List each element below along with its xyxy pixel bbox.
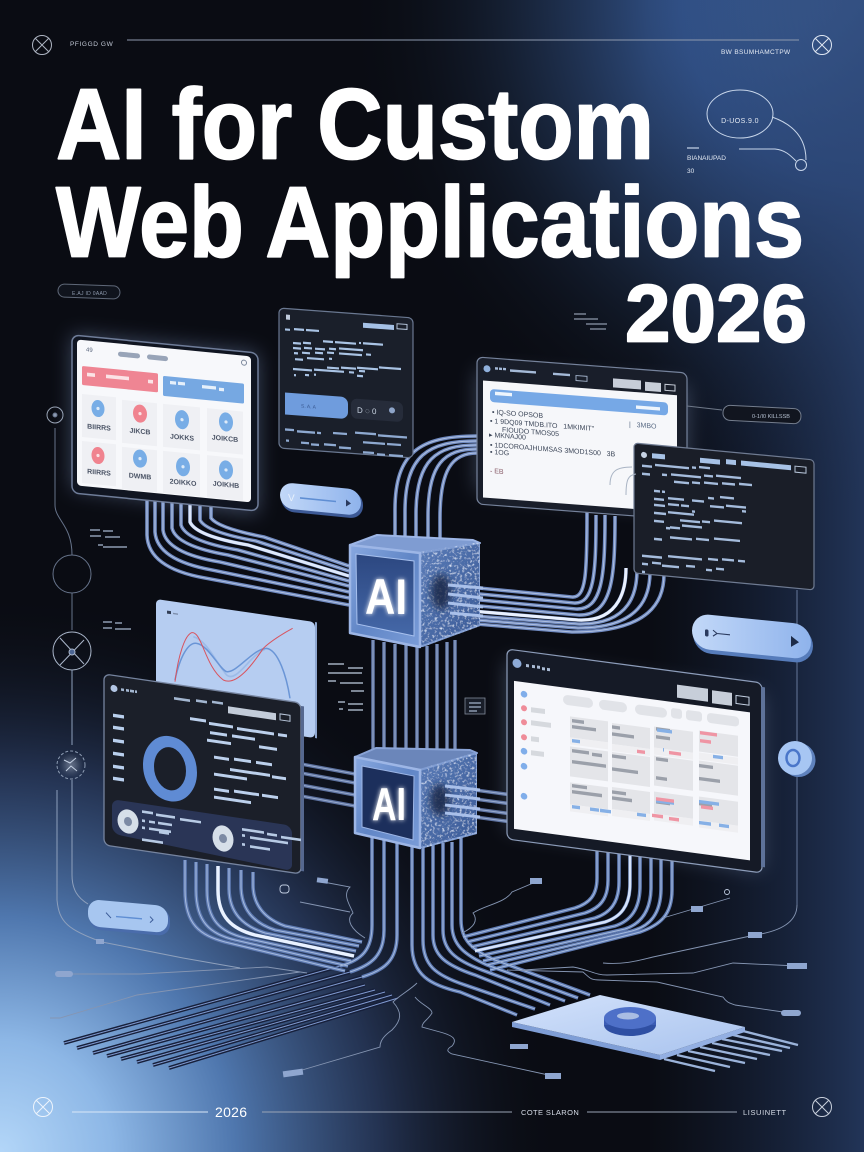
cube label AI: AI [372, 778, 406, 830]
window bar [512, 658, 749, 708]
window top bar [484, 365, 675, 393]
thin connector traces with chips [50, 877, 807, 1079]
toolbar icons [351, 398, 403, 422]
annotation diagram top right: BIANAIUPAD [687, 155, 726, 162]
annotation diagram top right: 30 [687, 168, 695, 175]
metric tiles: JOIKHB [213, 481, 239, 490]
text dashes chart [328, 664, 364, 710]
annotation diagram top right [687, 90, 806, 175]
blue header card [163, 376, 244, 404]
code lines [642, 462, 752, 582]
lower lines [285, 427, 407, 456]
title: 2026 [625, 268, 807, 360]
metric tiles: BIIRRS [87, 423, 111, 433]
footer strip [34, 1098, 832, 1120]
icon: top-left crossed circle [32, 36, 52, 54]
code lines [285, 328, 401, 383]
pill button upper: V [288, 493, 295, 504]
header left label: PFIGGD GW [70, 41, 114, 48]
footer labels: COTE SLARON [521, 1108, 579, 1117]
header right label: BW BSUMHAMCTPW [721, 49, 791, 56]
icon: crossed circuit node [53, 632, 91, 670]
panel: dark code window [279, 308, 413, 458]
panel: browser window with list [477, 357, 687, 520]
header strip [32, 36, 832, 56]
list text: - EB [490, 468, 504, 476]
footer strip: LISUINETT [743, 1108, 787, 1117]
list text: ▪ IQ-SO OPSOB [492, 409, 543, 420]
title: AI for Custom [56, 68, 654, 180]
left side circuit line [47, 407, 240, 968]
sidebar ticks [113, 715, 124, 780]
panel: dashboard UI [72, 335, 258, 514]
dashboard header [86, 345, 246, 369]
chart text lines [190, 719, 287, 808]
sidebar [521, 691, 551, 803]
small chip label center [465, 698, 485, 714]
list text: FIOUDO TMOS05 [502, 427, 559, 438]
pill button upper [280, 482, 363, 519]
blue action button: S. A. A [301, 404, 317, 411]
annotation diagram top right: D-UOS.9.0 [721, 118, 759, 125]
connector line right [796, 590, 798, 905]
wires fanning to bottom [64, 835, 672, 1068]
metric tiles: JOIKCB [212, 435, 238, 444]
footer year: 2026 [215, 1104, 247, 1120]
lower AI cube [355, 748, 480, 848]
label pill connected to browser: 0-1/I0 KILLSSB [752, 414, 790, 420]
list text: ▪ 1DCOROAJHUMSAS 3MOD1S00 3B [490, 442, 616, 459]
wires to top cube [147, 436, 664, 632]
line chart [175, 628, 293, 698]
blue search bar [490, 389, 668, 416]
cable ends right side [448, 585, 483, 616]
title [56, 68, 807, 360]
list text [489, 409, 657, 488]
disc node right [778, 741, 816, 777]
window bar [110, 684, 290, 722]
circuit plate with puck [512, 995, 745, 1060]
metric tiles: DWMB [129, 473, 151, 482]
list text: ▸ MKNAJ00 [489, 432, 526, 442]
white content area [514, 681, 750, 860]
filter pills [563, 693, 739, 728]
panel: dark code overlay [634, 443, 814, 590]
metric tiles [82, 394, 243, 501]
small label pill left [58, 284, 120, 299]
icon: bottom-right crossed circle [812, 1098, 832, 1116]
icon: globe node [57, 751, 85, 779]
text dashes left [90, 530, 131, 629]
cube label AI: AI [365, 569, 407, 625]
wire stubs under plate [664, 1031, 798, 1071]
puck [604, 1007, 656, 1036]
small label pill left: E.AJ ID 0AAD [72, 291, 107, 297]
wires between cubes [301, 640, 512, 822]
panel: data table window [507, 649, 765, 873]
icon: top-right crossed circle [812, 36, 832, 54]
pill button lower left [88, 899, 170, 936]
text dashes beside 2026 [574, 314, 607, 329]
label pill connected to browser [687, 405, 801, 424]
top bar [641, 452, 806, 473]
toolbar icons: D ◌ 0 [357, 406, 377, 416]
list text: ▪ 1OG [490, 449, 509, 457]
panel: chart card [156, 599, 317, 738]
list text: | 3MBO [629, 422, 657, 431]
blue action button [285, 392, 348, 419]
top AI cube [350, 535, 483, 647]
red header card [82, 366, 158, 392]
pill button right [692, 613, 813, 664]
metric tiles: 2OIKKO [170, 478, 197, 488]
dashboard header: 49 [86, 347, 93, 354]
card label [167, 611, 178, 615]
arc detail [610, 467, 636, 495]
metric tiles: JIKCB [130, 428, 150, 437]
table cells [570, 713, 738, 834]
cell marks [572, 718, 720, 812]
list text: ▪ 1 9DQ09 TMDB.ITO 1MKIMIT" [490, 418, 595, 433]
cable ends right side [445, 786, 480, 817]
lower control strip [112, 799, 301, 872]
panel: dark dashboard with donut [104, 674, 304, 874]
metric tiles: JOKKS [170, 434, 194, 443]
donut chart [148, 739, 192, 799]
icon: bottom-left crossed circle [34, 1098, 52, 1116]
top bar [286, 315, 407, 329]
metric tiles: RIIRRS [87, 468, 111, 478]
